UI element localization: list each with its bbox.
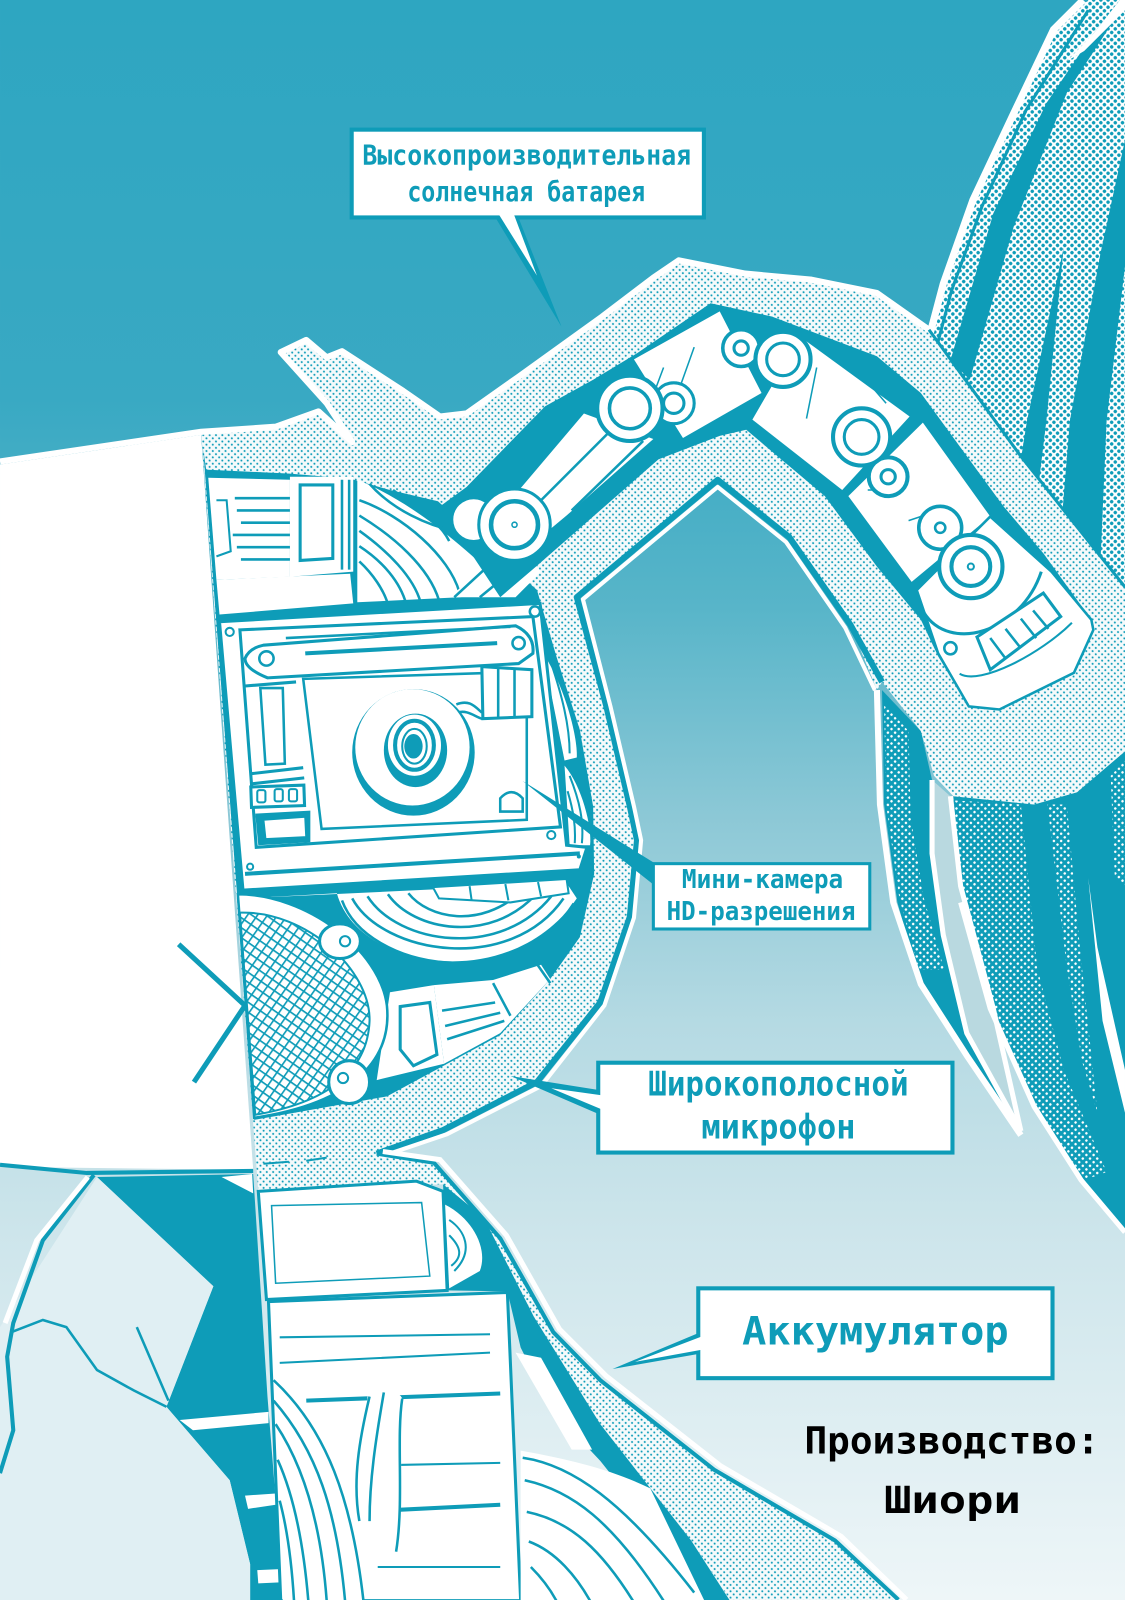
- callout: mini camera: HD-разрешения: [667, 897, 855, 927]
- teeth and coil of cables: [245, 879, 577, 963]
- production credit: [804, 1419, 1099, 1522]
- arm joints: [451, 330, 1002, 598]
- callout: wideband microphone: Широкополосной: [648, 1064, 909, 1103]
- production credit: Производство:: [804, 1419, 1099, 1463]
- callout: accumulator: Аккумулятор: [742, 1309, 1009, 1354]
- callout: solar battery: солнечная батарея: [407, 176, 645, 208]
- battery plates: [268, 1292, 521, 1600]
- arm plates: [634, 311, 990, 582]
- lower small parts: [377, 960, 550, 1080]
- upper torso box: [258, 1181, 482, 1300]
- camera module frame: [219, 603, 587, 890]
- callout: solar battery: Высокопроизводительная: [362, 139, 691, 171]
- face silhouette: [0, 435, 253, 1173]
- callout: wideband microphone: [510, 1063, 952, 1153]
- body and shoulder: [0, 1174, 284, 1600]
- arm end unit: [917, 517, 1093, 710]
- callout: solar battery: [352, 130, 704, 327]
- upper block: [208, 477, 353, 615]
- machinery: torso: [258, 1181, 730, 1600]
- microphone mesh: [238, 894, 387, 1118]
- production credit: Шиори: [884, 1478, 1021, 1522]
- side cables right of camera: [543, 653, 590, 845]
- machinery: head interior: [203, 449, 594, 1120]
- callout: wideband microphone: микрофон: [701, 1107, 855, 1146]
- hair on the right: [877, 0, 1125, 1232]
- callout: mini camera: Мини-камера: [682, 865, 843, 895]
- camera lens: [352, 689, 475, 816]
- cables behind arm: [357, 480, 541, 604]
- callout: mini camera: [523, 781, 870, 929]
- robotic arm: [440, 303, 1093, 710]
- cables over battery: [274, 1353, 704, 1600]
- callout: accumulator: [613, 1288, 1053, 1378]
- arm bar: [510, 413, 653, 541]
